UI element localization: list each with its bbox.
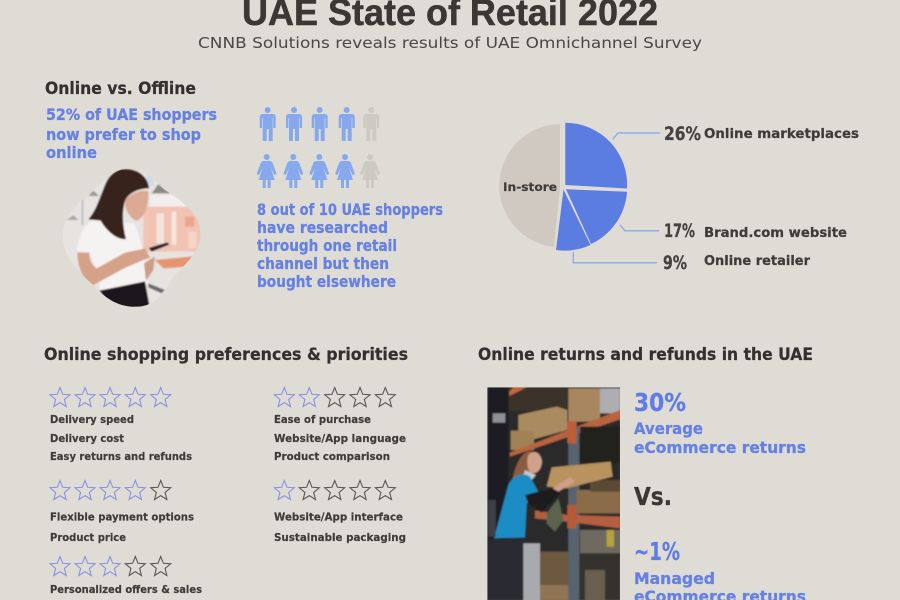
label: versus: Vs. xyxy=(634,482,672,511)
pie chart: shopping channels xyxy=(499,123,627,251)
slice: in-store xyxy=(499,124,560,247)
labels: 1 star priorities xyxy=(274,510,406,544)
panel: five star group xyxy=(50,388,192,463)
labels: 2 star priorities: Ease of purchase xyxy=(274,413,371,426)
slice: online marketplaces xyxy=(565,123,627,188)
stars: 5 of 5 xyxy=(50,388,171,406)
labels: 4 star priorities xyxy=(50,510,194,544)
panel: online vs offline xyxy=(45,79,217,310)
photo: warehouse worker xyxy=(487,387,621,600)
stat: 30% average returns: eCommerce returns xyxy=(634,438,806,457)
stat: 30% average returns: Average xyxy=(634,419,703,438)
panel: one star group xyxy=(274,480,406,544)
panel: two star group xyxy=(274,388,406,463)
callout: online marketplaces 26% xyxy=(613,123,859,145)
callout: online marketplaces 26%: Online marketplaces xyxy=(704,126,859,142)
labels: 1 star priorities: Website/App interface xyxy=(274,510,403,524)
labels: 2 star priorities: Product comparison xyxy=(274,450,390,463)
icon row: women xyxy=(257,154,380,188)
text: 8 out of 10 shoppers: bought elsewhere xyxy=(257,272,396,291)
labels: 4 star priorities: Product price xyxy=(50,531,126,544)
heading: shopping preferences: Online shopping preferences & priorities xyxy=(44,345,408,364)
text: 52% prefer online: online xyxy=(46,143,97,162)
slice: online retailer xyxy=(556,190,590,251)
stat: 1% managed returns xyxy=(634,537,806,600)
callout: brand.com website 17%: 17% xyxy=(664,220,695,242)
labels: 5 star priorities: Delivery cost xyxy=(50,432,124,445)
callout: online retailer 9% xyxy=(573,252,810,274)
stars: 1 of 5 xyxy=(274,480,395,499)
labels: 5 star priorities: Delivery speed xyxy=(50,413,134,426)
panel: four star group xyxy=(50,480,194,544)
heading: online vs offline: Online vs. Offline xyxy=(45,79,196,98)
callout: online retailer 9%: 9% xyxy=(663,252,687,274)
panel: three star group xyxy=(50,556,202,596)
photo: woman shopping on phone xyxy=(60,167,203,310)
slice: brand.com website xyxy=(566,189,627,244)
callout: online marketplaces 26%: 26% xyxy=(664,123,701,145)
labels: 5 star priorities xyxy=(50,413,192,463)
text: 8 out of 10 shoppers: through one retail xyxy=(257,236,397,255)
label: 3 star priority: Personalized offers & sales xyxy=(50,583,202,596)
labels: 2 star priorities xyxy=(274,413,406,463)
text: 8 out of 10 shoppers xyxy=(257,200,443,291)
subtitle: CNNB Solutions reveals results of UAE Omnichannel Survey xyxy=(198,34,702,52)
text: 8 out of 10 shoppers: have researched xyxy=(257,218,388,237)
heading: returns and refunds: Online returns and refunds in the UAE xyxy=(478,345,813,364)
labels: 2 star priorities: Website/App language xyxy=(274,432,406,445)
text: 8 out of 10 shoppers: channel but then xyxy=(257,254,389,273)
icon row: men xyxy=(260,107,379,141)
text: 52% prefer online: 52% of UAE shoppers xyxy=(46,105,217,124)
labels: 1 star priorities: Sustainable packaging xyxy=(274,531,406,544)
icon group: people, 8 of 10 highlighted xyxy=(257,107,380,188)
callout: brand.com website 17%: Brand.com website xyxy=(704,225,847,241)
callout: brand.com website 17% xyxy=(620,220,847,242)
text: 8 out of 10 shoppers: 8 out of 10 UAE shoppers xyxy=(257,200,443,219)
stat: 30% average returns xyxy=(634,388,806,457)
text: 52% prefer online xyxy=(46,105,217,162)
callout: online retailer 9%: Online retailer xyxy=(704,253,810,269)
labels: 4 star priorities: Flexible payment options xyxy=(50,510,194,524)
stat: 30% average returns: 30% xyxy=(634,388,686,417)
stars: 4 of 5 xyxy=(50,480,171,499)
text: 52% prefer online: now prefer to shop xyxy=(46,125,201,144)
stat: 1% managed returns: Managed xyxy=(634,569,715,588)
stars: 2 of 5 xyxy=(274,388,395,406)
label: in-store: In-store xyxy=(503,180,557,194)
stat: 1% managed returns: ~1% xyxy=(634,537,680,566)
labels: 5 star priorities: Easy returns and refunds xyxy=(50,450,192,463)
stars: 3 of 5 xyxy=(50,556,171,575)
